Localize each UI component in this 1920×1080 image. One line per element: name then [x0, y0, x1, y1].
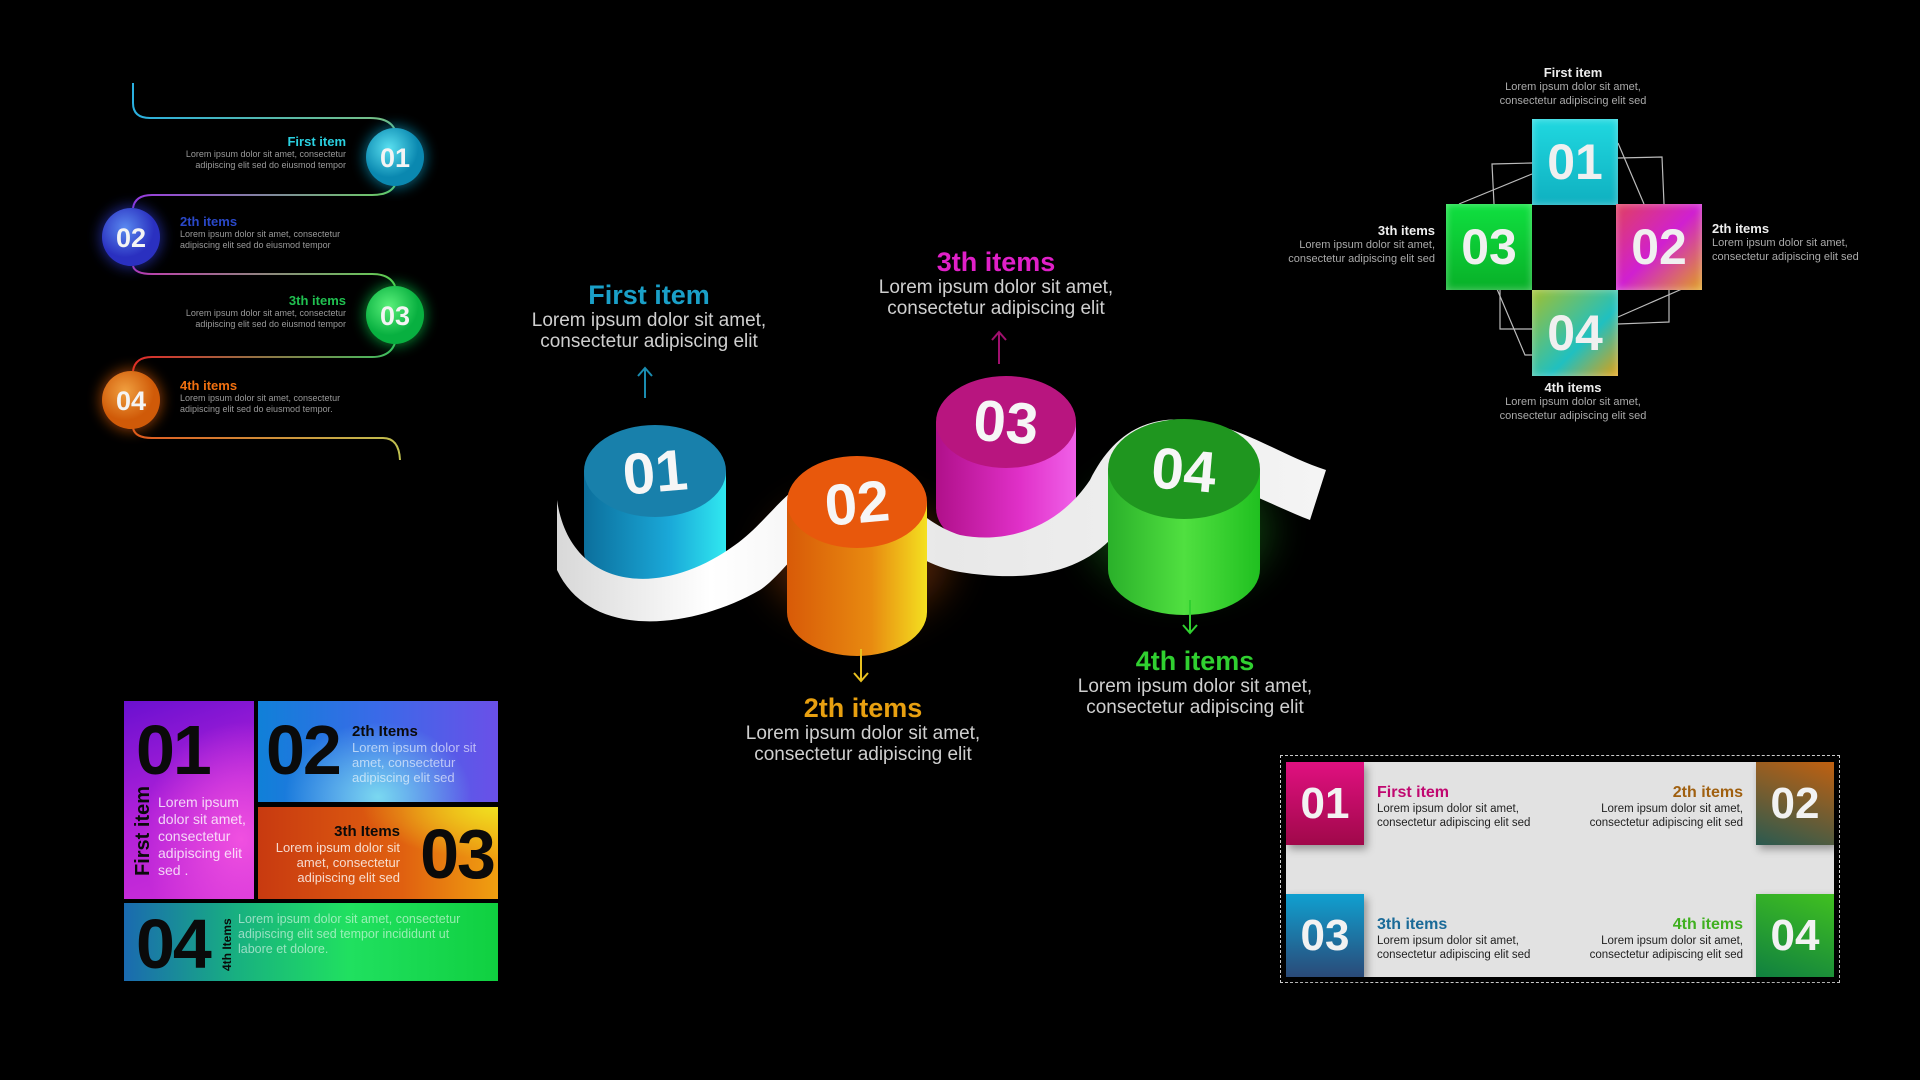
- box 01: 01: [1547, 134, 1603, 190]
- panel: top-right cross: [1288, 65, 1859, 422]
- box 01: dolor sit amet,: [158, 811, 246, 827]
- text: 2th items: adipiscing elit sed do eiusmod tempor: [180, 240, 331, 250]
- box 04: [124, 903, 498, 981]
- text: 2th items: Lorem ipsum dolor sit amet,: [1601, 803, 1743, 815]
- ribbon: [557, 419, 1326, 621]
- box 04: [1532, 290, 1618, 376]
- text: 3th items: 3th items: [1377, 916, 1447, 933]
- box 01: [124, 701, 254, 899]
- box 03: 03: [420, 815, 494, 893]
- box 01: adipiscing elit: [158, 845, 242, 861]
- box 03: Lorem ipsum dolor sit: [276, 840, 400, 855]
- timeline lines and circles: 01: [380, 143, 410, 173]
- box 01: 01: [136, 711, 210, 789]
- text: 3th items: Lorem ipsum dolor sit amet,: [1377, 935, 1519, 947]
- label: first item: consectetur adipiscing elit sed: [1500, 95, 1646, 107]
- text: 4th items: Lorem ipsum dolor sit amet,: [1601, 935, 1743, 947]
- text: 3th items: [186, 293, 346, 329]
- text: first item: First item: [1377, 784, 1449, 801]
- box 03: adipiscing elit sed: [297, 870, 400, 885]
- box 04: labore et dolore.: [238, 942, 328, 956]
- box 02: amet, consectetur: [352, 755, 455, 770]
- label: 4th items: consectetur adipiscing elit sed: [1500, 410, 1646, 422]
- text: first item: Lorem ipsum dolor sit amet,: [1377, 803, 1519, 815]
- label: 3th items: Lorem ipsum dolor sit amet,: [879, 277, 1113, 298]
- cylinder 04: 04: [1149, 435, 1219, 506]
- text: first item: consectetur adipiscing elit sed: [1377, 817, 1530, 829]
- label: 2th items: [1712, 221, 1859, 263]
- text: 4th items: 4th items: [180, 378, 237, 393]
- cylinder 02: 02: [822, 468, 892, 539]
- outline lines: [1458, 142, 1681, 356]
- box 02: [1616, 204, 1702, 290]
- light background: [1286, 762, 1834, 977]
- label: 3th items: 3th items: [937, 247, 1055, 277]
- square 01: 01: [1301, 778, 1349, 828]
- text: 4th items: consectetur adipiscing elit sed: [1590, 949, 1743, 961]
- box 04: Lorem ipsum dolor sit amet, consectetur: [238, 912, 460, 926]
- box 02: 2th Items: [352, 723, 418, 740]
- label: 2th items: Lorem ipsum dolor sit amet,: [746, 723, 980, 744]
- label: first item: First item: [1544, 65, 1602, 80]
- text: 2th items: consectetur adipiscing elit sed: [1590, 817, 1743, 829]
- square 04: 04: [1771, 910, 1819, 960]
- box 04: adipiscing elit sed tempor incididunt ut: [238, 927, 449, 941]
- text: first item: [1377, 784, 1530, 829]
- label: 4th items: Lorem ipsum dolor sit amet,: [1078, 676, 1312, 697]
- text: 2th items: Lorem ipsum dolor sit amet, consectetur: [180, 229, 340, 239]
- panel: bottom-left color grid: [124, 701, 498, 981]
- timeline lines and circles: 02: [116, 223, 146, 253]
- label: 2th items: 2th items: [1712, 221, 1769, 236]
- label: 3th items: consectetur adipiscing elit sed: [1288, 253, 1435, 265]
- box 03: [258, 807, 498, 899]
- box 01: [1532, 119, 1618, 205]
- text: 4th items: 4th items: [1673, 916, 1743, 933]
- text: 4th items: Lorem ipsum dolor sit amet, consectetur: [180, 393, 340, 403]
- text: 3th items: adipiscing elit sed do eiusmod tempor: [195, 319, 346, 329]
- panel: top-left timeline: [91, 83, 434, 460]
- text: first item: adipiscing elit sed do eiusmod tempor: [195, 160, 346, 170]
- text: first item: [186, 134, 346, 170]
- label: first item: Lorem ipsum dolor sit amet,: [1505, 81, 1641, 93]
- timeline lines and circles: [91, 83, 434, 460]
- label: 2th items: Lorem ipsum dolor sit amet,: [1712, 237, 1848, 249]
- box 04: 4th Items: [220, 918, 234, 971]
- label: 2th items: 2th items: [804, 693, 922, 723]
- panel: bottom-right light card: [1280, 755, 1840, 983]
- square 03: [1286, 894, 1364, 977]
- text: 3th items: Lorem ipsum dolor sit amet, consectetur: [186, 308, 346, 318]
- box 03: [1446, 204, 1532, 290]
- label: first item: [1500, 65, 1646, 107]
- text: first item: Lorem ipsum dolor sit amet, consectetur: [186, 149, 346, 159]
- label: 3th items: consectetur adipiscing elit: [887, 298, 1105, 319]
- label: first item: consectetur adipiscing elit: [540, 331, 758, 352]
- timeline lines and circles: 04: [116, 386, 146, 416]
- square 02: [1756, 762, 1834, 845]
- box 03: 03: [1461, 219, 1517, 275]
- label: 4th items: 4th items: [1544, 380, 1602, 395]
- text: 2th items: 2th items: [180, 214, 237, 229]
- square 03: 03: [1301, 910, 1349, 960]
- timeline lines and circles: 03: [380, 301, 410, 331]
- label: 2th items: consectetur adipiscing elit sed: [1712, 251, 1859, 263]
- text: 2th items: [180, 214, 340, 250]
- label: 4th items: Lorem ipsum dolor sit amet,: [1505, 396, 1641, 408]
- cylinder 01: [584, 425, 726, 595]
- label: 2th items: [746, 693, 980, 765]
- label: first item: First item: [588, 280, 710, 310]
- cylinder 04: [1108, 419, 1260, 615]
- box 02: adipiscing elit sed: [352, 770, 455, 785]
- label: 4th items: [1078, 646, 1312, 718]
- ribbon and cylinders graphic: [557, 330, 1326, 682]
- label: 3th items: 3th items: [1378, 223, 1435, 238]
- box 02: 02: [266, 711, 340, 789]
- label: first item: [532, 280, 766, 352]
- cylinder 02: [787, 456, 927, 656]
- label: 3th items: [1288, 223, 1435, 265]
- label: 4th items: 4th items: [1136, 646, 1254, 676]
- label: 2th items: consectetur adipiscing elit: [754, 744, 972, 765]
- square 01: [1286, 762, 1364, 845]
- box 01: sed .: [158, 862, 188, 878]
- label: 3th items: [879, 247, 1113, 319]
- text: 4th items: [180, 378, 340, 414]
- text: 4th items: [1590, 916, 1743, 961]
- box 03: 3th Items: [334, 823, 400, 840]
- box 02: [258, 701, 498, 802]
- label: 4th items: [1500, 380, 1646, 422]
- cylinder 01: 01: [620, 437, 690, 508]
- label: 4th items: consectetur adipiscing elit: [1086, 697, 1304, 718]
- cylinder 03: [936, 376, 1076, 552]
- label: 3th items: Lorem ipsum dolor sit amet,: [1299, 239, 1435, 251]
- arrows: [638, 332, 1197, 681]
- text: 2th items: 2th items: [1673, 784, 1743, 801]
- box 01: First item: [132, 786, 154, 876]
- box 04: 04: [136, 905, 210, 981]
- box 01: Lorem ipsum: [158, 794, 239, 810]
- square 04: [1756, 894, 1834, 977]
- square 02: 02: [1771, 778, 1819, 828]
- text: 3th items: [1377, 916, 1530, 961]
- text: first item: First item: [287, 134, 346, 149]
- box 03: amet, consectetur: [297, 855, 400, 870]
- text: 3th items: consectetur adipiscing elit sed: [1377, 949, 1530, 961]
- box 02: 02: [1631, 219, 1687, 275]
- panel: center 3D ribbon cylinders: [532, 247, 1326, 765]
- cylinder 03: 03: [972, 388, 1040, 457]
- box 04: 04: [1547, 305, 1603, 361]
- text: 4th items: adipiscing elit sed do eiusmod tempor.: [180, 404, 333, 414]
- box 02: Lorem ipsum dolor sit: [352, 740, 476, 755]
- label: first item: Lorem ipsum dolor sit amet,: [532, 310, 766, 331]
- box 01: consectetur: [158, 828, 230, 844]
- text: 3th items: 3th items: [289, 293, 346, 308]
- text: 2th items: [1590, 784, 1743, 829]
